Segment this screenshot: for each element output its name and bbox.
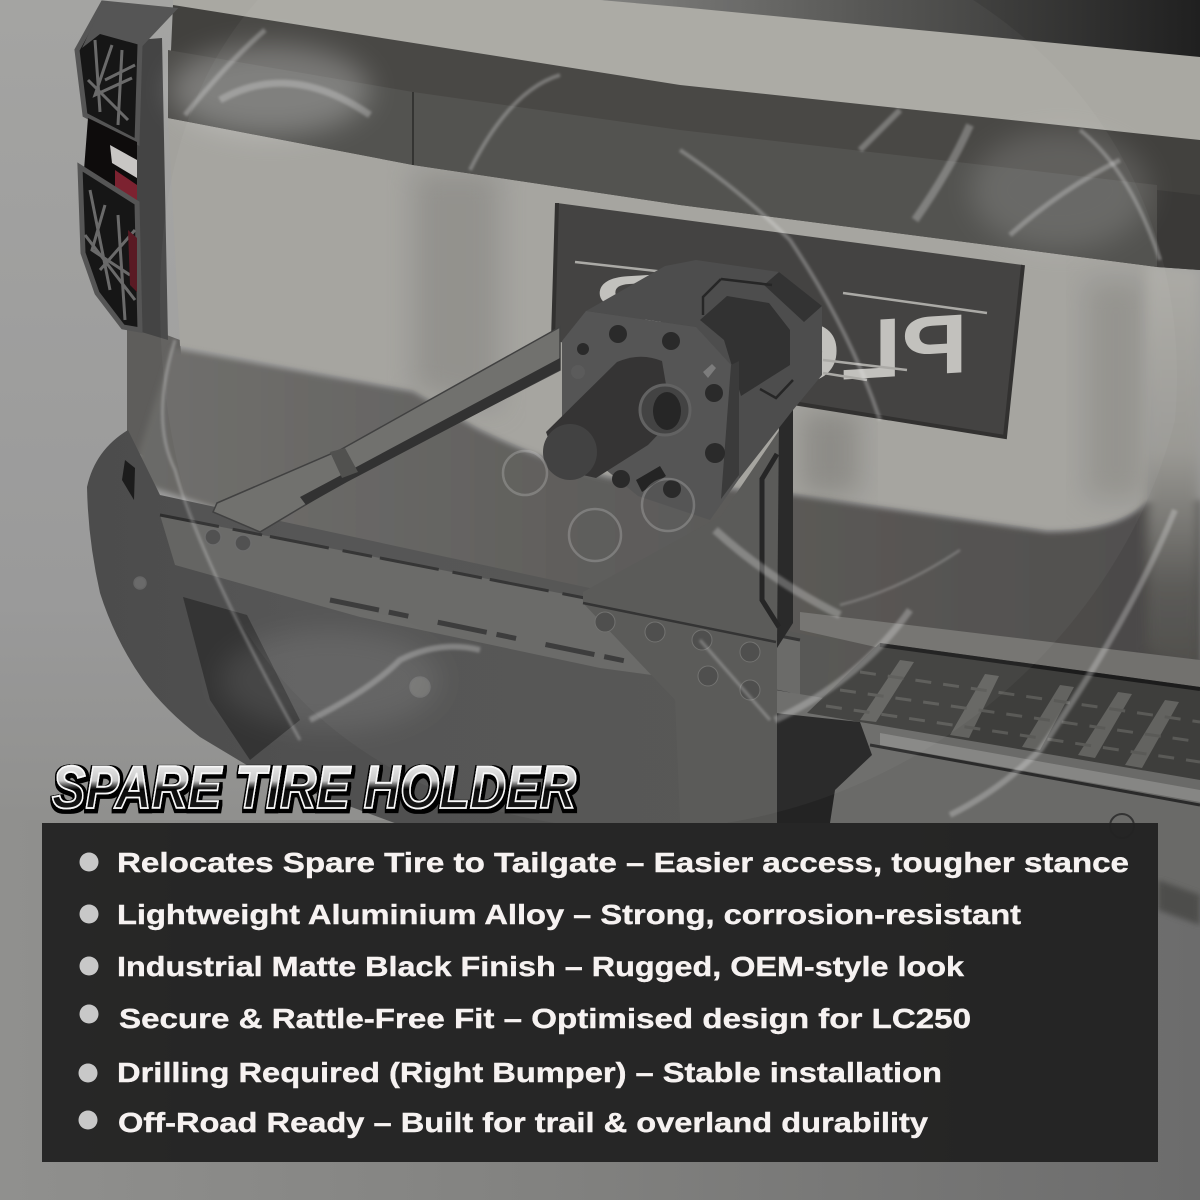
mounting post: [125, 38, 168, 340]
rear bumper: [87, 430, 830, 825]
small smoke rings: [503, 451, 694, 561]
dark area above roof band: [600, 0, 1200, 60]
rubber lip: [880, 733, 1200, 802]
front octagon plate: [562, 311, 739, 520]
vehicle tailgate: [127, 0, 1200, 700]
lower tailgate recess: [130, 348, 1200, 700]
body shading right: [1085, 280, 1147, 500]
lower red glow: [128, 230, 137, 292]
bumper bolts: [134, 529, 430, 697]
feature: relocates spare tire: Relocates Spare Tire to Tailgate – Easier access, tougher stance: [117, 847, 1129, 878]
spindle end cap: [543, 424, 597, 480]
tread body: [807, 643, 1200, 780]
tread cross lines: [826, 672, 1200, 762]
dark seam above band: [160, 515, 800, 640]
lower light strip: [800, 612, 1200, 700]
roof band: [173, 0, 1200, 140]
ring bore: [653, 392, 681, 430]
tail light: [77, 3, 173, 340]
feature: matte black finish: Industrial Matte Black Finish – Rugged, OEM-style look: [117, 951, 964, 982]
spindle cylinder: [546, 357, 672, 478]
title: Spare Tire Holder: SPARE TIRE HOLDER: [52, 754, 576, 821]
bumper body: [87, 430, 830, 825]
spare tire holder bracket: [213, 260, 822, 823]
smoke wisps: [162, 30, 1175, 815]
octagon dark facet: [764, 272, 822, 322]
feature: lightweight alloy: Lightweight Aluminium Alloy – Strong, corrosion-resistant: [117, 899, 1021, 930]
upright dark edge: [777, 408, 793, 648]
hitch bolt ring: [1110, 814, 1134, 838]
feature: off-road ready: Off-Road Ready – Built for trail & overland durability: [118, 1107, 928, 1138]
arm lower dark face: [300, 358, 560, 505]
side plate edge: [721, 361, 739, 499]
upper lattice: [88, 40, 135, 125]
tailgate body panel: [168, 118, 1157, 530]
dark side panel: [183, 597, 300, 760]
ghost tire disc: [160, 0, 1177, 830]
trim seam: [412, 92, 414, 165]
trim inset panel: [168, 50, 1157, 267]
panel background: [42, 823, 1158, 1162]
logo swoosh lines: [575, 262, 987, 380]
lower plate holes: [595, 612, 760, 700]
lower seam: [330, 600, 790, 695]
right body strip: [1147, 262, 1200, 680]
dark tailgate trim: [168, 5, 1200, 270]
arm clamp: [330, 448, 358, 478]
licence plate: [553, 203, 1023, 437]
plate frame edge: [553, 203, 1023, 437]
light middle: [84, 118, 137, 215]
white lens segment: [110, 145, 137, 178]
panel: feature list: [42, 823, 1158, 1162]
lip groove: [870, 745, 1200, 805]
plate board: [553, 203, 1023, 437]
smoke glow lower: [220, 630, 440, 730]
body shading below plate: [800, 410, 860, 495]
upright and lower plate: [583, 410, 793, 823]
support arm: [213, 327, 560, 532]
upper lens: [77, 3, 173, 142]
feature: drilling required: Drilling Required (Right Bumper) – Stable installation: [117, 1057, 942, 1088]
tread bars: [860, 660, 1179, 768]
mirrored logo left fragment: P: [596, 259, 668, 341]
corner vent: [122, 460, 135, 500]
smoke glow on trim: [170, 45, 370, 135]
smoke glow on trim right: [970, 130, 1150, 250]
tread dark top edge: [880, 645, 1200, 689]
trim right step: [1157, 190, 1200, 270]
lower plate seam: [583, 603, 776, 642]
top cap: [82, 3, 173, 48]
lower lattice: [85, 190, 135, 320]
lower bay: [775, 690, 1200, 900]
rear octagon: [586, 260, 822, 479]
recess outline: [703, 279, 793, 398]
upright inset line: [762, 454, 779, 627]
lower lens: [80, 167, 140, 330]
bumper main band: [160, 515, 800, 695]
left post lower: [127, 320, 190, 470]
feature: rattle-free fit: Secure & Rattle-Free Fit – Optimised design for LC250: [119, 1003, 971, 1034]
mounting holes: [571, 325, 725, 498]
translucent smoke tire overlay: [160, 0, 1177, 830]
central hex block: [700, 296, 790, 396]
floor lower band: [0, 820, 1200, 1200]
red lens segment: [115, 170, 137, 210]
dark hanger shadow: [775, 713, 872, 823]
body shading near seam: [413, 170, 500, 410]
lower bay shadow: [1158, 880, 1200, 925]
running board step: [775, 643, 1200, 925]
threaded ring: [640, 385, 690, 435]
mirrored logo: PLO: [763, 296, 968, 402]
